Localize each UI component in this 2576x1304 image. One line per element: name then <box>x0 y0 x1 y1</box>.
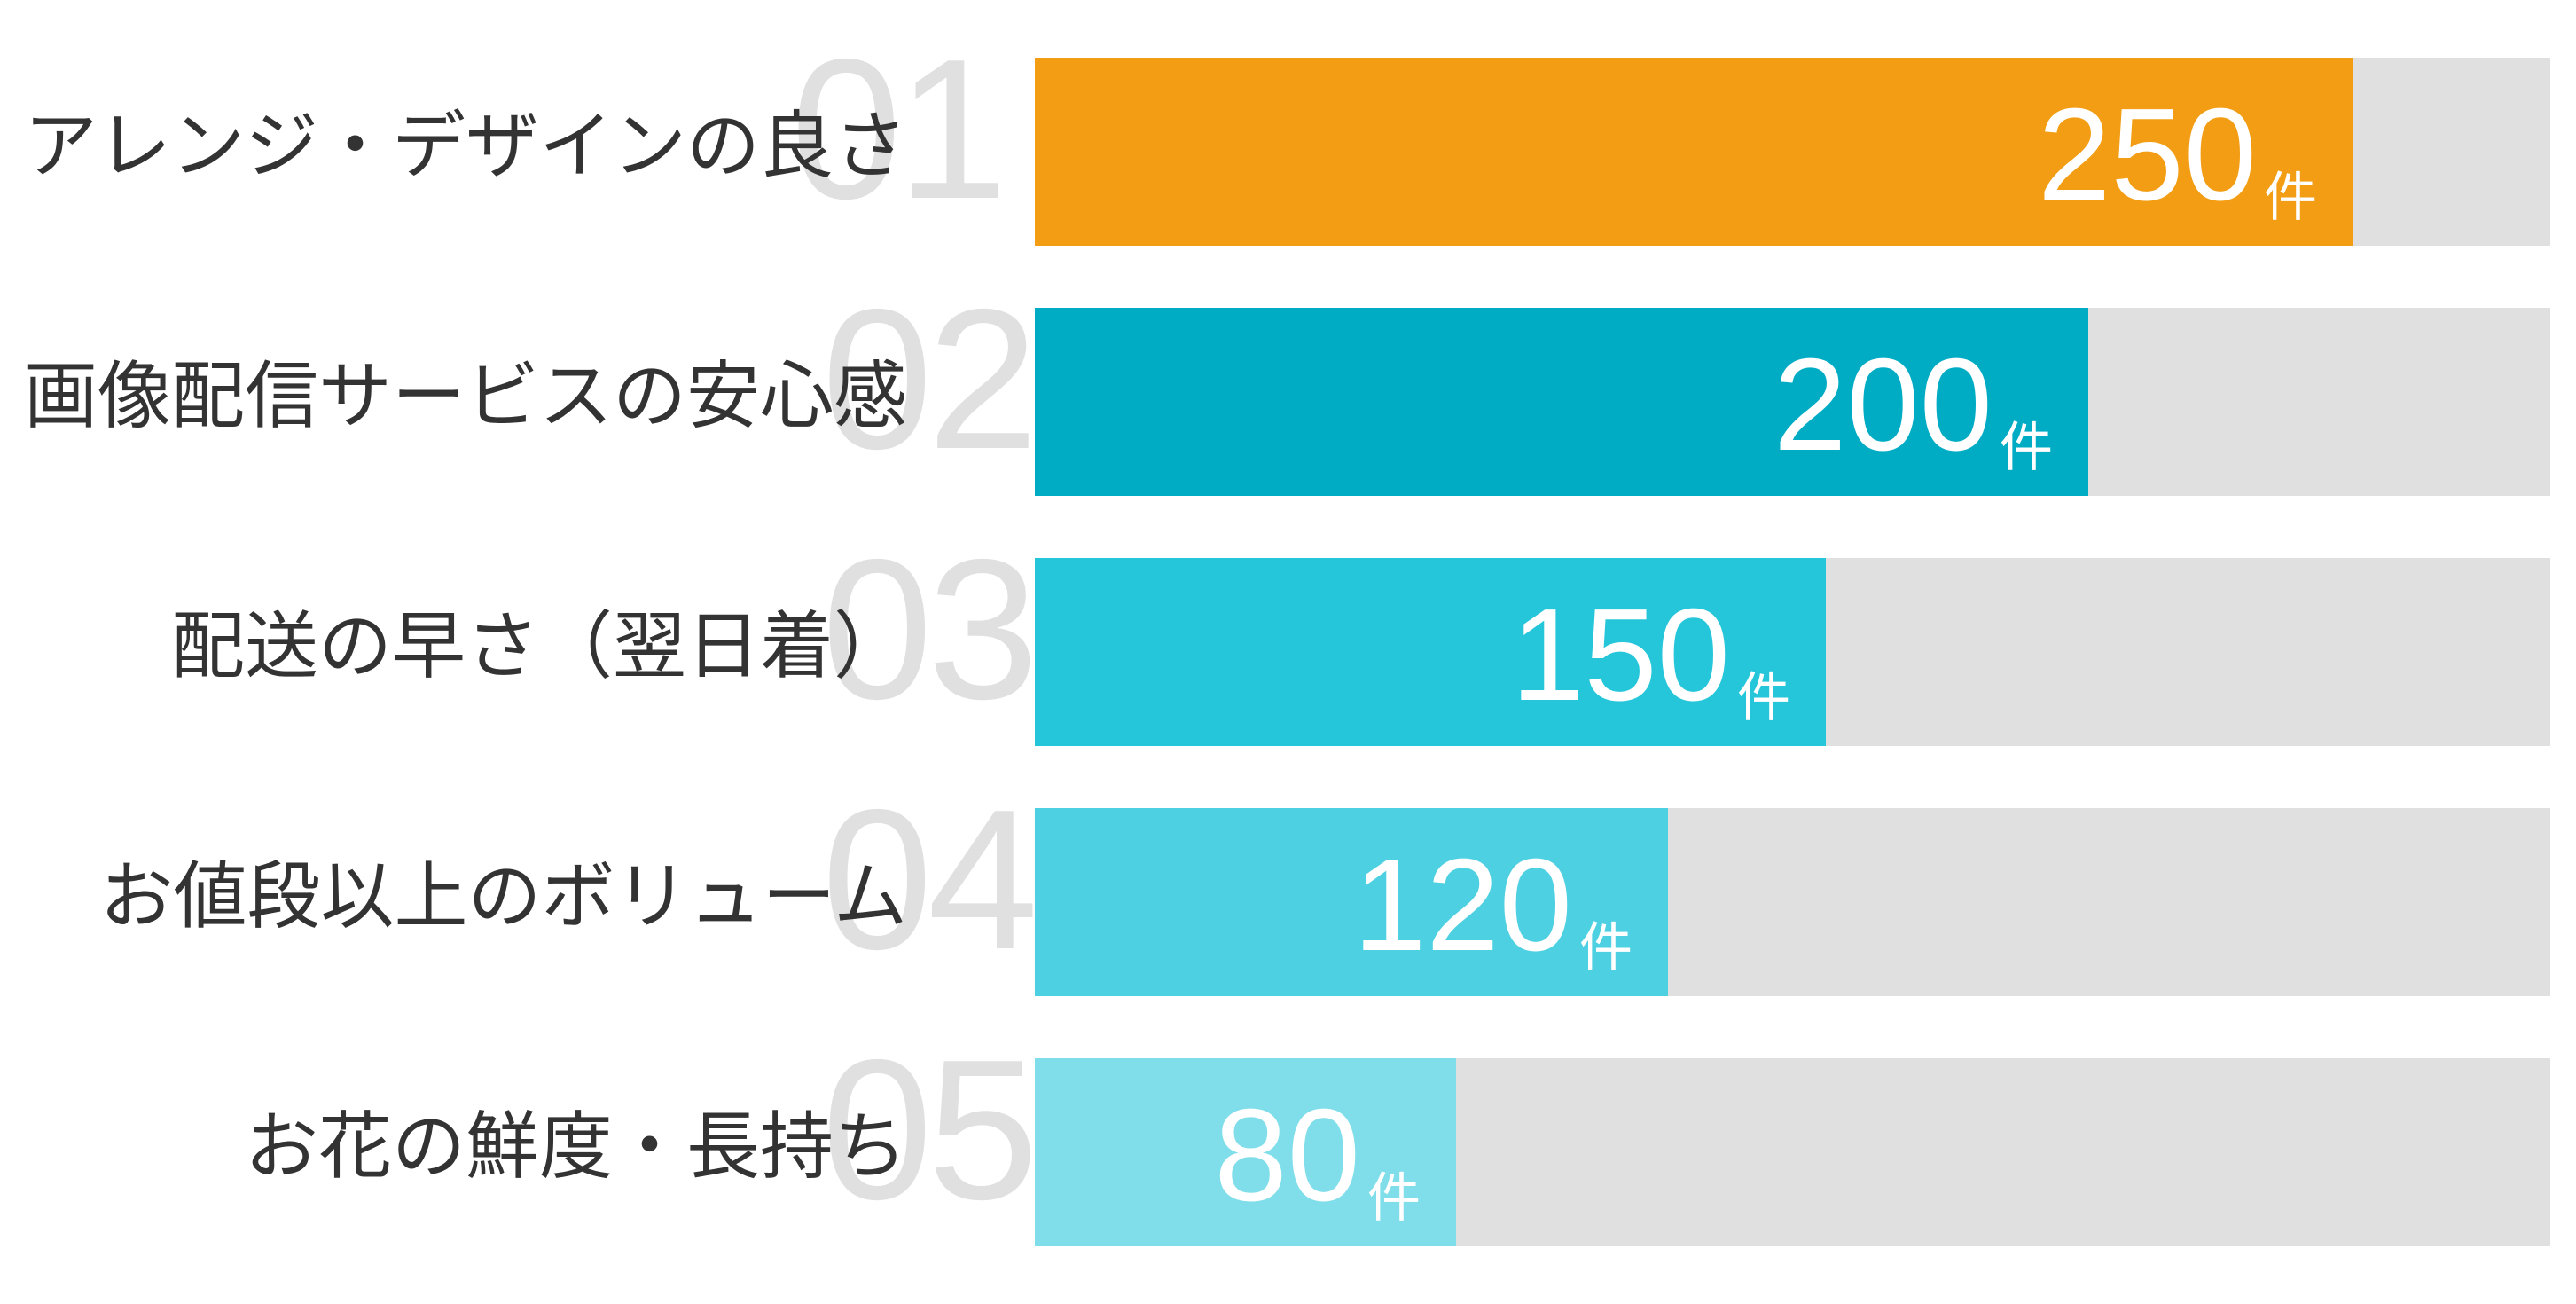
row 5 <box>245 1017 2550 1246</box>
label: お値段以上のボリューム <box>99 855 907 938</box>
bar fill 250: 250件 <box>2038 82 2317 228</box>
bar fill 150: 150件 <box>1511 582 1790 728</box>
row 1 <box>24 17 2550 246</box>
bar track <box>1035 1058 2550 1246</box>
bar track <box>1035 558 2550 746</box>
row 3 <box>171 517 2550 746</box>
label: アレンジ・デザインの良さ <box>24 105 907 187</box>
bar track <box>1035 308 2550 496</box>
row 4 <box>99 767 2550 996</box>
bar track <box>1035 808 2550 996</box>
bar fill 120 <box>1035 808 1668 996</box>
bar fill 200 <box>1035 308 2088 496</box>
label: 配送の早さ（翌日着） <box>171 605 907 687</box>
rank number 03: 03 <box>822 517 1033 741</box>
bar fill 200: 200件 <box>1773 332 2053 478</box>
bar fill 80 <box>1035 1058 1456 1246</box>
label: お花の鮮度・長持ち <box>245 1105 907 1188</box>
bar fill 250 <box>1035 58 2353 246</box>
rank number 04: 04 <box>822 767 1033 991</box>
bar track <box>1035 58 2550 246</box>
rank number 05: 05 <box>822 1017 1033 1241</box>
rank number 01: 01 <box>791 17 1002 240</box>
bar fill 80: 80件 <box>1214 1082 1421 1229</box>
rank number 02: 02 <box>822 267 1033 491</box>
bar fill 120: 120件 <box>1353 832 1633 978</box>
label: 画像配信サービスの安心感 <box>24 355 907 437</box>
row 2 <box>24 267 2550 496</box>
bar fill 150 <box>1035 558 1826 746</box>
